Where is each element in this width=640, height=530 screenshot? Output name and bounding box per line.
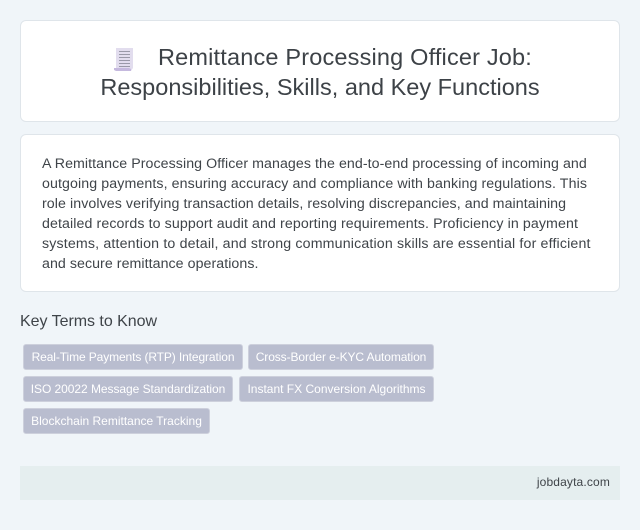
- tag: Cross-Border e-KYC Automation: [256, 350, 426, 364]
- text block: role summary: role involves verifying transaction details, resolving discrepancies, and maintaining: [42, 196, 566, 212]
- footer bar: [20, 466, 620, 500]
- heading: key terms: Key Terms to Know: [20, 313, 157, 330]
- title: Responsibilities, Skills, and Key Functions: [100, 74, 540, 100]
- panel: header: [20, 20, 620, 122]
- tag: [23, 376, 233, 402]
- tag: [23, 344, 243, 370]
- icon: document receipt: [114, 48, 133, 71]
- tag: ISO 20022 Message Standardization: [31, 382, 225, 396]
- text block: role summary: detailed records to support audit and reporting requirements. Proficiency in payment: [42, 216, 578, 232]
- panel: description: [20, 134, 620, 292]
- text block: role summary: systems, attention to detail, and strong communication skills are essential for efficient: [42, 236, 591, 252]
- text block: role summary: A Remittance Processing Officer manages the end-to-end processing of incoming and: [42, 156, 587, 172]
- tag: [23, 408, 210, 434]
- text block: role summary: [42, 156, 591, 272]
- title: [100, 44, 540, 100]
- tag: Blockchain Remittance Tracking: [31, 414, 202, 428]
- tag: Instant FX Conversion Algorithms: [247, 382, 426, 396]
- tag: Real-Time Payments (RTP) Integration: [32, 350, 234, 364]
- title: Remittance Processing Officer Job:: [158, 44, 532, 70]
- tag list: key terms: [23, 344, 434, 434]
- tag: [239, 376, 434, 402]
- tag: [248, 344, 434, 370]
- text block: role summary: outgoing payments, ensuring accuracy and compliance with banking regulations. This: [42, 176, 587, 192]
- text block: role summary: and secure remittance operations.: [42, 256, 258, 272]
- footer source: jobdayta.com: [537, 475, 610, 489]
